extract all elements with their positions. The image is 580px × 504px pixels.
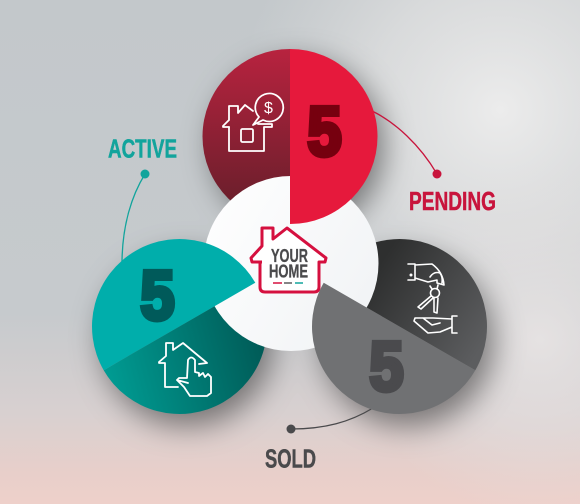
dot: active: [140, 170, 150, 178]
icon: house with pointing finger: [159, 343, 211, 396]
panel: pending bright half: [290, 49, 378, 224]
connector: sold: [291, 408, 373, 429]
logo text: home: HOME: [269, 262, 308, 282]
connector: active: [122, 174, 145, 264]
panel: active bright half: [92, 239, 255, 370]
panel: active dark half: [104, 283, 267, 414]
number: sold: 5: [369, 327, 404, 405]
logo dashes: [273, 282, 303, 284]
connector: pending: [372, 111, 437, 174]
dot: pending: [432, 170, 442, 178]
icon: your home logo: [251, 228, 326, 292]
icon: house with price bubble: [223, 93, 283, 151]
number: active: 5: [140, 256, 175, 334]
number: pending: 5: [307, 92, 342, 170]
label: active: ACTIVE: [108, 134, 177, 164]
label: sold: SOLD: [265, 444, 316, 474]
panel: sold bright half: [312, 283, 475, 414]
drop shadows: [101, 60, 494, 426]
icon: house with price bubble: $: [264, 100, 273, 117]
icon: keys handed over: [408, 264, 457, 333]
label: pending: PENDING: [409, 186, 496, 216]
panel: pending dark half: [202, 49, 290, 224]
panel: sold dark half: [324, 239, 487, 370]
panel: centre circle: [204, 176, 378, 351]
logo text: your: YOUR: [271, 246, 308, 266]
dot: sold: [286, 424, 296, 434]
